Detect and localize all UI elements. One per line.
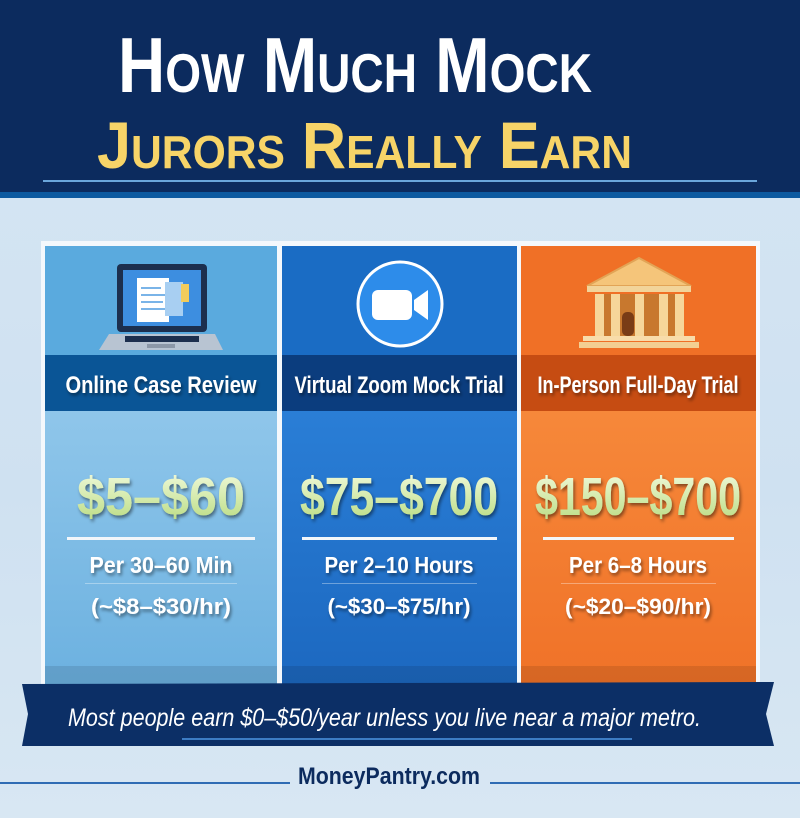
panel: online case review (45, 246, 277, 684)
icon: laptop (99, 264, 223, 350)
panel text: Per 2–10 Hours (324, 552, 474, 578)
panel text: Per 6–8 Hours (569, 552, 707, 578)
panel text (535, 372, 743, 623)
header band (0, 0, 800, 192)
panel text: Per 30–60 Min (90, 552, 232, 578)
panel text (294, 372, 506, 622)
panel text: (~$30–$75/hr) (328, 594, 470, 619)
banner callout (22, 682, 774, 746)
panel: virtual zoom (282, 246, 517, 684)
panel text: $5–$60 (77, 467, 245, 527)
footer brand: MoneyPantry.com (298, 763, 480, 790)
title: Jurors Really Earn (97, 108, 632, 182)
icon: zoom camera (356, 260, 444, 348)
title: How Much Mock (118, 21, 592, 109)
card frame (41, 241, 760, 686)
panel text: (~$20–$90/hr) (565, 594, 711, 619)
panel text: (~$8–$30/hr) (91, 594, 231, 619)
panel: in-person (521, 246, 756, 684)
title (43, 21, 757, 182)
icon: courthouse (579, 257, 699, 348)
panel text (66, 372, 260, 623)
